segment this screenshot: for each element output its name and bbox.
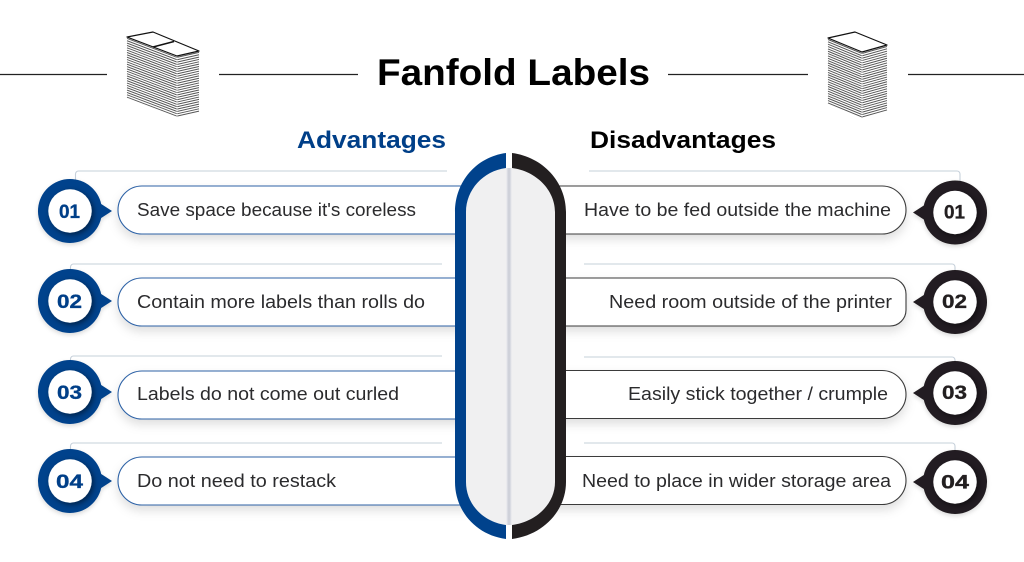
badge: advantage 01: 01: [59, 201, 80, 223]
pill: advantage 03 text: [118, 371, 470, 419]
panel: advantage 04: [38, 443, 470, 513]
pill: advantage 03 text: Labels do not come out curled: [137, 384, 399, 404]
pill: advantage 04 text: Do not need to restack: [137, 471, 337, 491]
panel: disadvantage 03: [550, 357, 987, 425]
header rule: far left: [0, 74, 107, 76]
pill: disadvantage 01 text: Have to be fed outside the machine: [584, 200, 891, 220]
header rule: inner left: [219, 74, 358, 76]
pill: advantage 01 text: [118, 186, 470, 234]
header rule: far right: [908, 74, 1024, 76]
badge: disadvantage 01: [913, 180, 987, 244]
pill: advantage 04 text: [118, 457, 470, 505]
pill: disadvantage 02 text: Need room outside of the printer: [609, 292, 892, 312]
badge: advantage 02: [38, 269, 112, 333]
pill: disadvantage 03 text: Easily stick together / crumple: [628, 384, 888, 404]
pill: disadvantage 04 text: [550, 456, 906, 504]
badge: disadvantage 02: [913, 270, 987, 334]
badge: advantage 04: [38, 449, 112, 513]
pill: advantage 02 text: [118, 278, 470, 326]
title: Fanfold Labels: [377, 52, 650, 93]
pill: advantage 02 text: Contain more labels than rolls do: [137, 292, 425, 312]
pill: advantage 01 text: Save space because it's coreless: [137, 200, 416, 220]
capsule: centre seam: [506, 168, 512, 525]
panel: advantage 02: [38, 264, 470, 333]
heading: advantages: Advantages: [297, 127, 446, 154]
header rule: inner right: [668, 74, 808, 76]
badge: disadvantage 04: 04: [941, 472, 969, 494]
central capsule divider: [455, 153, 566, 539]
badge: disadvantage 03: 03: [942, 382, 967, 404]
capsule: blue left arc: [455, 153, 506, 539]
badge: advantage 04: 04: [56, 471, 83, 493]
badge: advantage 01: [38, 179, 112, 243]
badge: advantage 02: 02: [57, 291, 82, 313]
panel: disadvantage 01: [550, 171, 987, 244]
badge: disadvantage 01: 01: [944, 202, 965, 224]
badge: advantage 03: [38, 360, 112, 424]
icon: left fanfold label stack: [127, 32, 199, 117]
capsule: black right arc: [512, 153, 566, 539]
panel: advantage 03: [38, 356, 470, 424]
heading: disadvantages: Disadvantages: [590, 127, 776, 154]
panel: disadvantage 02: [550, 264, 987, 334]
pill: disadvantage 01 text: [550, 186, 906, 234]
badge: disadvantage 04: [913, 450, 987, 514]
badge: disadvantage 02: 02: [942, 291, 967, 313]
pill: disadvantage 03 text: [550, 370, 906, 418]
panel: disadvantage 04: [550, 443, 987, 514]
capsule: grey interior: [466, 168, 555, 525]
badge: disadvantage 03: [913, 361, 987, 425]
panel: advantage 01: [38, 171, 470, 243]
pill: disadvantage 04 text: Need to place in wider storage area: [582, 471, 892, 491]
badge: advantage 03: 03: [57, 382, 82, 404]
pill: disadvantage 02 text: [550, 278, 906, 326]
icon: right fanfold label stack: [828, 32, 887, 117]
